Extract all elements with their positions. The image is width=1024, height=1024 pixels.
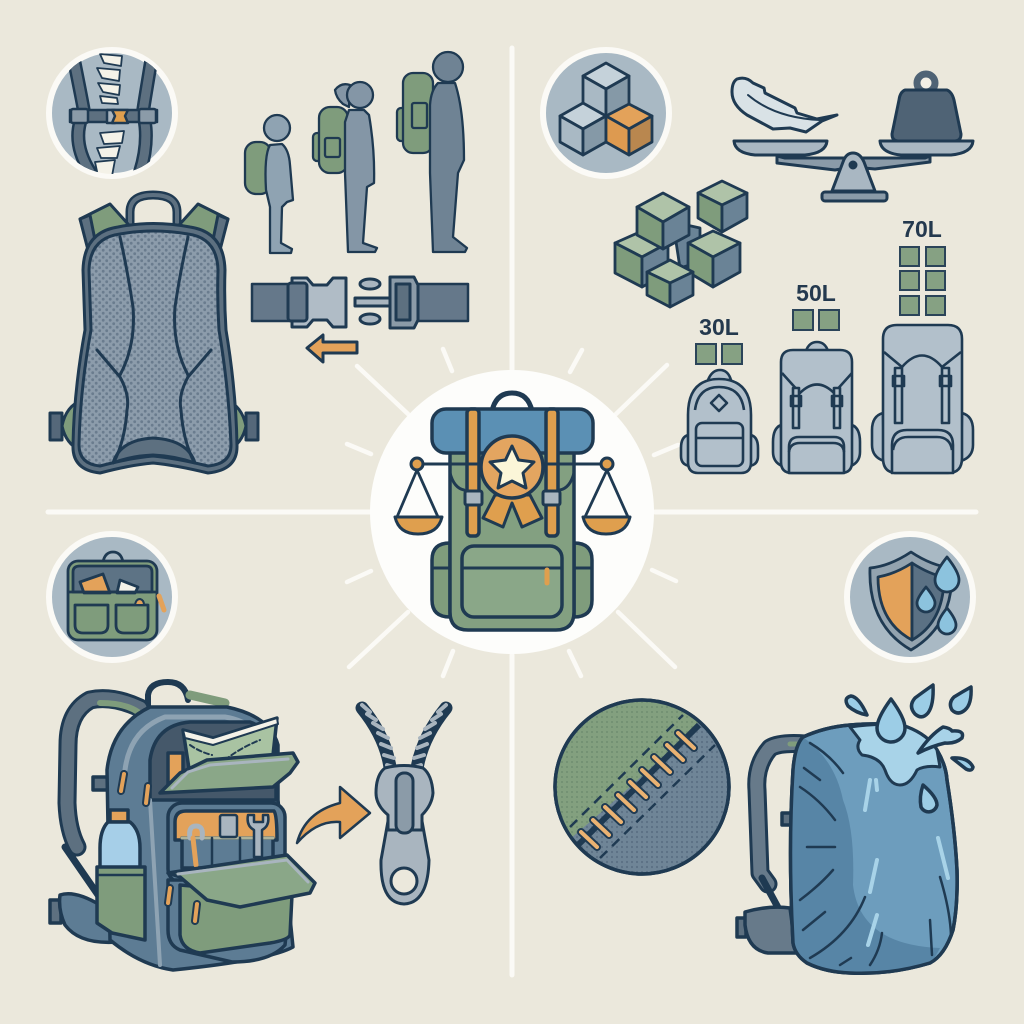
- balance scale with feather and weight: [732, 74, 973, 201]
- volume labels and packs: 50L: [796, 280, 836, 306]
- volume labels and packs: 30L: [699, 314, 739, 340]
- fabric swatch with seam: [555, 700, 729, 874]
- center burst rays: [347, 349, 678, 676]
- zipper pull: [362, 705, 446, 904]
- height comparison figures with backpacks: [245, 52, 467, 253]
- icon: organizer pocket badge: [49, 534, 175, 660]
- volume labels and packs: 70L: [902, 216, 942, 242]
- curved arrow to zipper: [297, 787, 370, 843]
- center medallion: backpack with scales and ribbon: [370, 370, 654, 654]
- icon: spine and harness badge: [49, 50, 175, 176]
- backpack with rain cover: [737, 685, 973, 973]
- cube pile: [615, 181, 747, 307]
- volume labels and packs: [681, 216, 973, 473]
- backpack back panel with mesh: [50, 195, 258, 473]
- organized backpack with pockets: [50, 682, 315, 970]
- buckle straps with arrow: [252, 277, 468, 362]
- icon: cubes badge: [543, 50, 669, 176]
- icon: shield with water drops badge: [847, 534, 973, 660]
